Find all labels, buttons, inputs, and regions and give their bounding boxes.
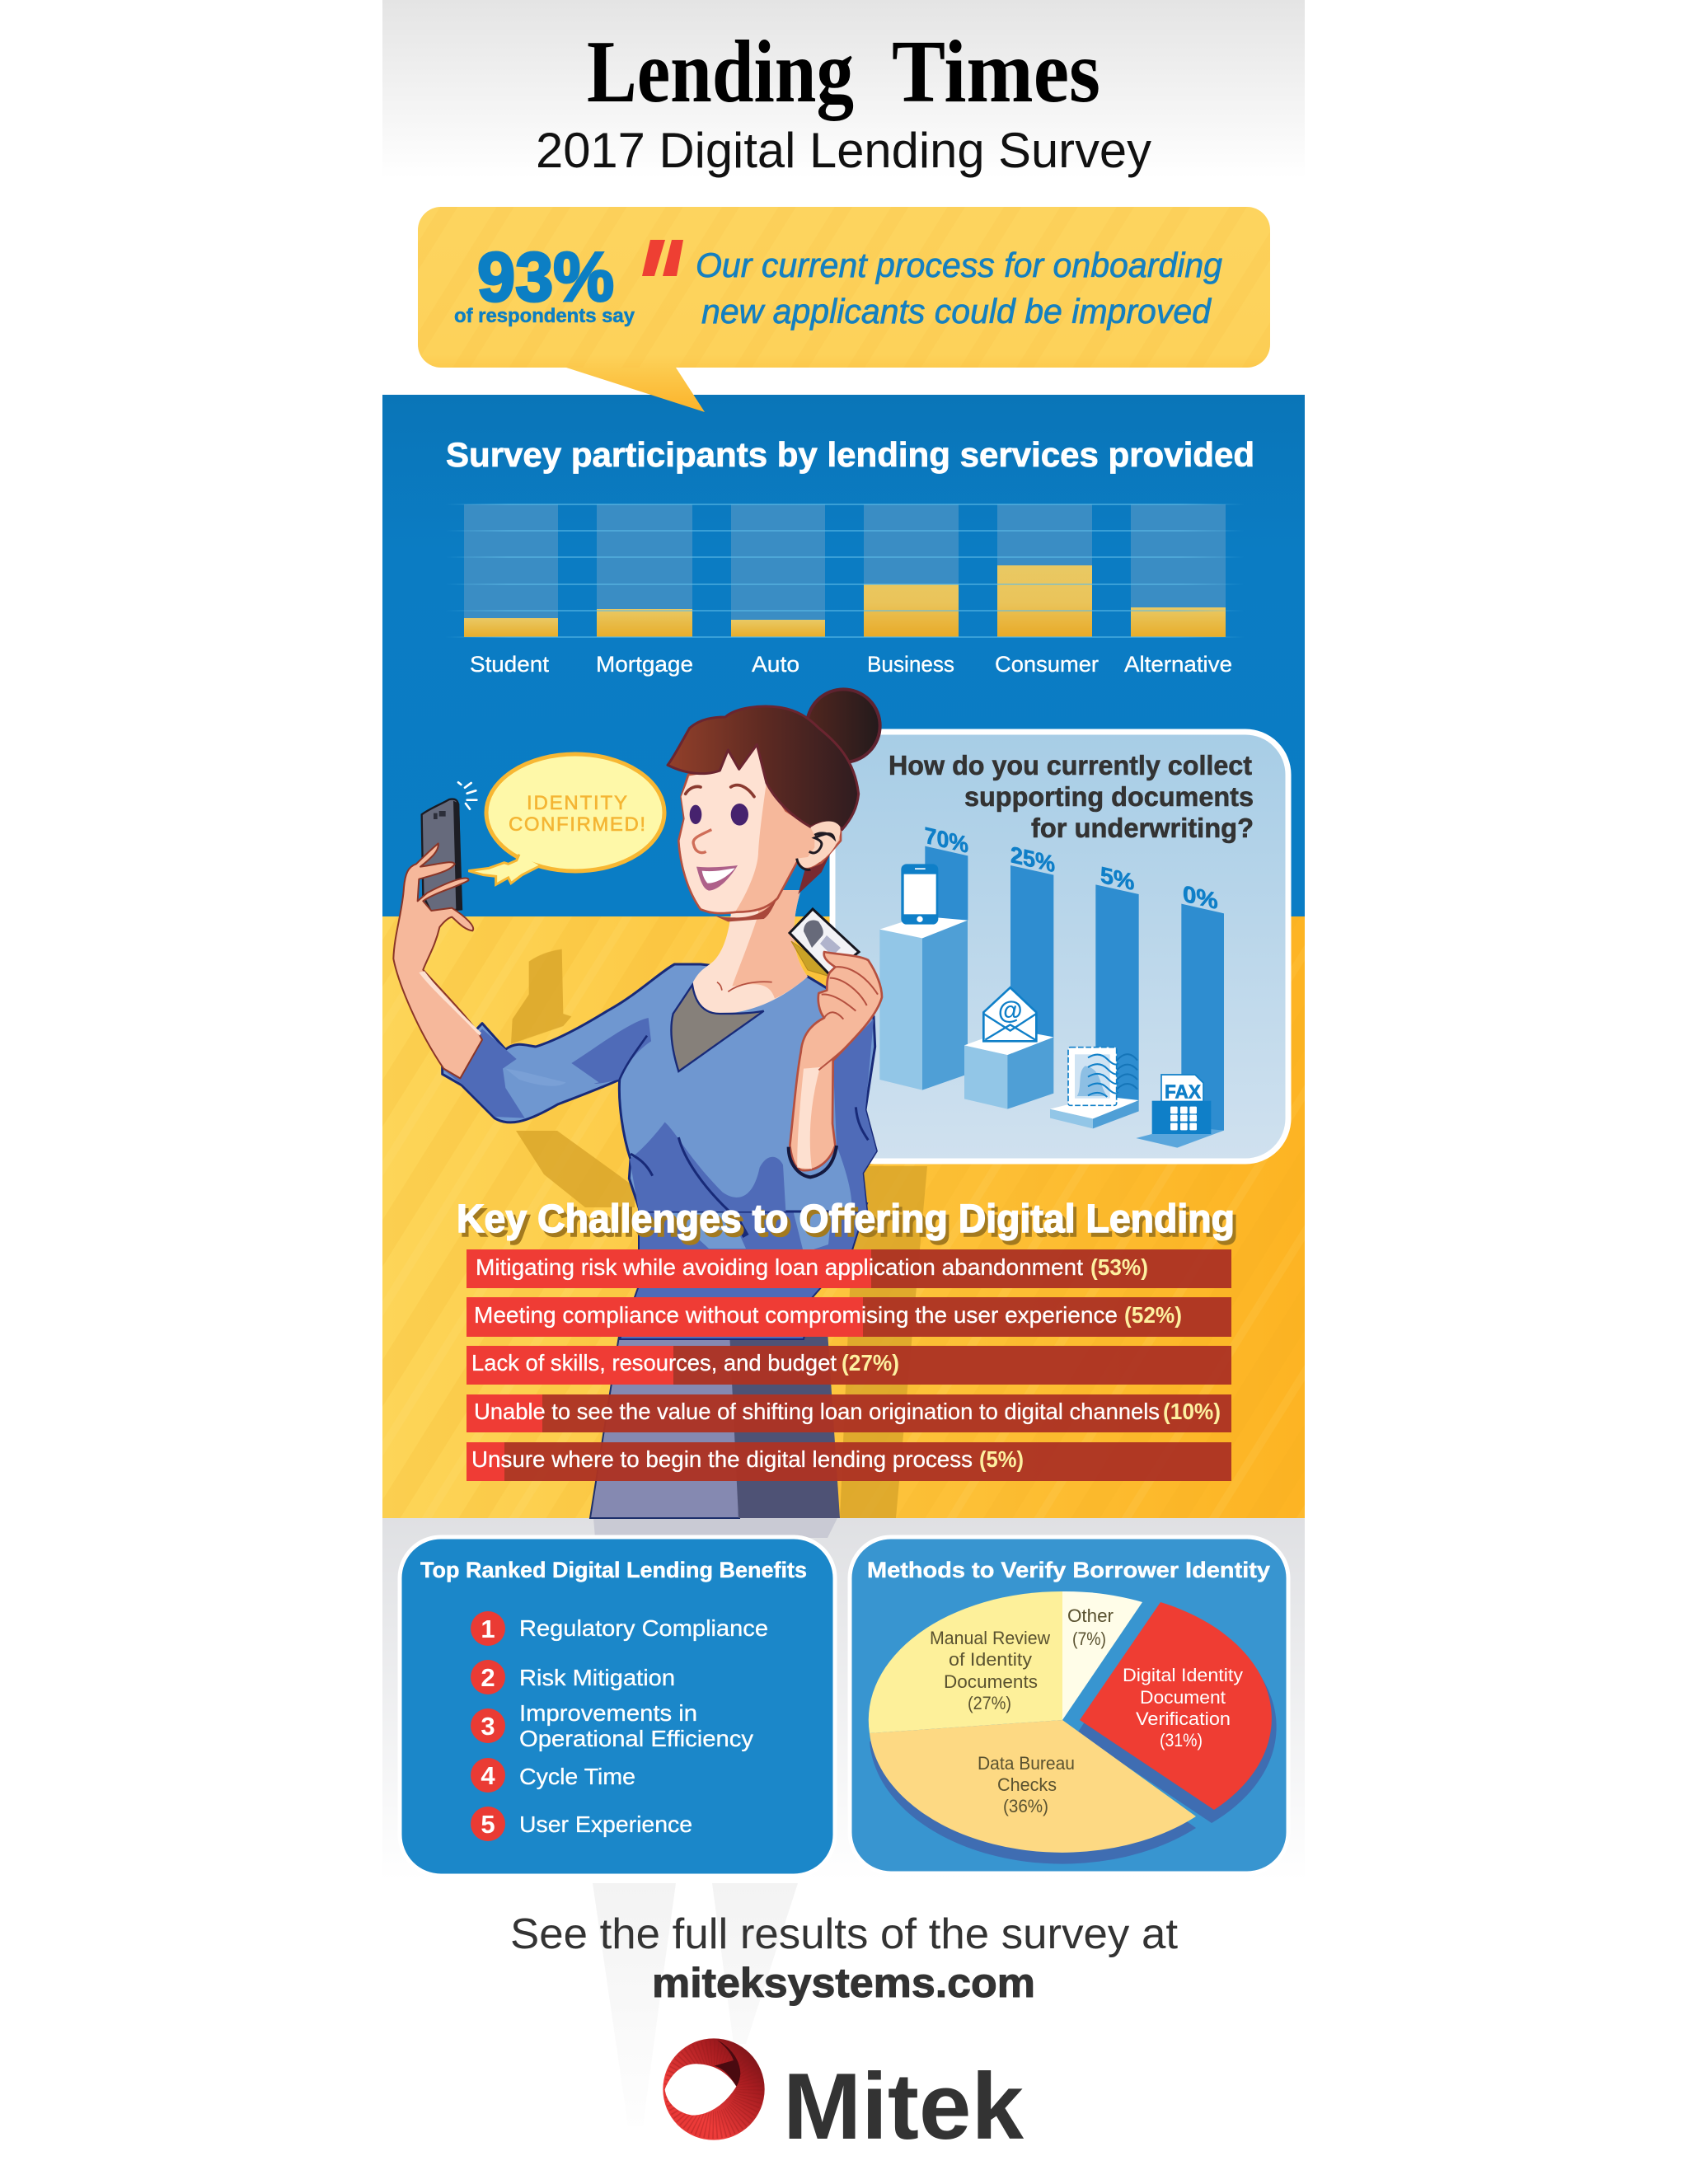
column: 25 percent email (964, 841, 1055, 1109)
label: data bureau: Data Bureau (978, 1753, 1075, 1774)
challenge 10 percent (467, 1394, 1231, 1432)
sleeve fold (620, 1036, 647, 1080)
pie slice: digital identity (1080, 1602, 1272, 1810)
label: data bureau: Checks (997, 1774, 1057, 1795)
pie slice: other (1062, 1591, 1142, 1720)
label: manual review: Manual Review (930, 1628, 1050, 1648)
question heading: How do you currently collect (889, 750, 1252, 780)
benefit 3: 3 (481, 1712, 495, 1741)
benefit 4: Cycle Time (519, 1764, 635, 1789)
label: manual review (930, 1628, 1050, 1713)
title (587, 23, 1100, 121)
benefit 5: User Experience (519, 1811, 692, 1837)
woman torso and shirt (443, 890, 876, 1212)
label: digital identity: Verification (1136, 1708, 1231, 1729)
icon: phone (422, 799, 462, 912)
column: 5 percent mail: 5% (1100, 862, 1134, 896)
footer call to action: See the full results of the survey at (510, 1910, 1179, 1958)
panel: methods to verify identity (850, 1537, 1288, 1873)
shirt folds (631, 1107, 868, 1212)
heading: survey participants: Survey participants by lending services provided (446, 435, 1254, 474)
woman head (668, 689, 880, 921)
ring radial ticks (678, 2054, 749, 2125)
column: 0 percent fax (1136, 881, 1224, 1148)
93 percent number: 93% (477, 238, 614, 316)
column: 70 percent phone: 70% (925, 823, 968, 859)
bar chart: lending services (445, 504, 1245, 677)
logo ring (663, 2038, 765, 2140)
benefits heading: Top Ranked Digital Lending Benefits (420, 1558, 807, 1582)
benefit 5: 5 (481, 1810, 495, 1839)
bar chart: lending services: Student (470, 652, 550, 677)
teeth (702, 868, 735, 883)
sleeve shading (443, 1018, 651, 1118)
benefit 2: 2 (481, 1663, 495, 1692)
panel: grey lower background (382, 1518, 1305, 1881)
trousers left leg (590, 1331, 739, 1518)
bar chart: lending services: Auto (752, 652, 799, 677)
label: digital identity (1123, 1665, 1243, 1750)
neck shading (732, 890, 808, 999)
trousers right leg (729, 1331, 840, 1518)
ear (796, 822, 841, 868)
ghost legs below the panel (593, 1518, 837, 2126)
quote line 2: new applicants could be improved (701, 292, 1212, 330)
heading: key challenges: Key Challenges to Offering Digital Lending (460, 1202, 1238, 1245)
bar chart: lending services: Alternative (1124, 652, 1232, 677)
jaw shadow (701, 898, 777, 921)
benefit 1: Regulatory Compliance (519, 1615, 768, 1641)
eyes (690, 804, 748, 826)
title: Times (892, 23, 1100, 121)
woman raised hand and phone (393, 782, 482, 1078)
label: other: Other (1067, 1605, 1114, 1626)
label: other: (7%) (1072, 1629, 1106, 1649)
label: digital identity: (31%) (1160, 1730, 1203, 1750)
bar chart: lending services: Business (867, 652, 954, 677)
speech bubble: identity confirmed (468, 754, 664, 884)
bar chart: lending services: Consumer (995, 652, 1099, 677)
benefit 1 (471, 1611, 768, 1646)
column: 25 percent email: 25% (1010, 841, 1055, 878)
column: 5 percent mail (1050, 862, 1139, 1128)
shirt lower highlights (659, 1203, 832, 1253)
challenge 10 percent: Unable to see the value of shifting loan origination to digital channels (474, 1399, 1160, 1424)
shirt lower shading (630, 1019, 876, 1212)
bar chart: lending services: Mortgage (596, 652, 693, 677)
isometric chart (879, 823, 1224, 1148)
mouth (696, 865, 738, 891)
panel: how do you collect documents (832, 732, 1288, 1161)
ring eye (665, 2064, 736, 2116)
benefit 4 (471, 1758, 635, 1793)
shirt (443, 964, 876, 1212)
footer call to action (510, 1910, 1179, 2006)
benefit 3: Operational Efficiency (519, 1726, 753, 1751)
phone edge (453, 801, 462, 910)
label: data bureau: (36%) (1003, 1796, 1048, 1816)
pie chart (869, 1591, 1277, 1864)
phone signal sparkle (458, 782, 476, 809)
hand and forearm (393, 843, 482, 1078)
benefit 3: Improvements in (519, 1700, 697, 1726)
shirt lower fold (731, 1210, 746, 1236)
pie depth (870, 1732, 1196, 1864)
column: 70 percent phone (879, 823, 968, 1090)
challenge 52 percent (467, 1297, 1231, 1337)
footer call to action: miteksystems.com (652, 1960, 1035, 2006)
challenge 53 percent (467, 1249, 1231, 1288)
challenge 10 percent: (10%) (1163, 1399, 1221, 1424)
question heading (889, 750, 1254, 843)
bar list: key challenges (467, 1249, 1231, 1481)
challenge 27 percent: (27%) (842, 1350, 899, 1376)
neck and chest (692, 890, 808, 1014)
ear inner (797, 833, 834, 869)
methods card (850, 1537, 1288, 1873)
collarbone (717, 982, 772, 991)
quote line 1: Our current process for onboarding (696, 246, 1222, 284)
face (678, 744, 841, 913)
hair behind neck (798, 830, 842, 894)
logo wordmark: Mitek (783, 2055, 1025, 2159)
challenge 52 percent: (52%) (1124, 1302, 1182, 1328)
panel: top ranked benefits (400, 1537, 835, 1876)
of respondents say: of respondents say (454, 305, 635, 327)
methods heading: Methods to Verify Borrower Identity (867, 1558, 1270, 1582)
heading: key challenges: Key Challenges to Offering Digital Lending (457, 1197, 1235, 1241)
challenge 27 percent (467, 1346, 1231, 1385)
label: data bureau (978, 1753, 1075, 1816)
icon: quotation mark (642, 240, 683, 276)
benefits card (400, 1537, 835, 1876)
label: digital identity: Document (1140, 1687, 1226, 1708)
subtitle: 2017 Digital Lending Survey (536, 123, 1151, 178)
column: 25 percent email: @ (998, 996, 1023, 1024)
shirt lower (620, 1203, 867, 1339)
label: other (1067, 1605, 1114, 1649)
callout stripes (418, 207, 1270, 368)
benefit 3 (471, 1700, 753, 1751)
speech bubble: identity confirmed: CONFIRMED! (509, 813, 645, 836)
face light area (680, 745, 767, 912)
woman shadow on yellow background (511, 949, 927, 1518)
challenge 53 percent: (53%) (1090, 1254, 1148, 1280)
challenge 5 percent: (5%) (979, 1446, 1024, 1472)
challenge 52 percent: Meeting compliance without compromising the user experience (474, 1302, 1118, 1328)
panel card (832, 732, 1288, 1161)
pie slice: manual review (869, 1591, 1062, 1733)
forearm highlight (419, 971, 481, 1036)
pie slice: data bureau (870, 1720, 1196, 1853)
ring inner dark crescent (715, 2040, 740, 2087)
hair bun (807, 689, 880, 762)
panel: survey participants background (382, 395, 1305, 917)
question heading: for underwriting? (1031, 813, 1254, 843)
panel: yellow lower background (382, 916, 1305, 1518)
forearm highlight (797, 1067, 820, 1169)
speech bubble: identity confirmed: IDENTITY (527, 792, 627, 814)
nose (693, 830, 711, 853)
label: manual review: Documents (944, 1671, 1038, 1692)
phone camera (434, 811, 446, 819)
hand and forearm shape (790, 952, 882, 1170)
hair (668, 706, 859, 830)
benefit 4: 4 (481, 1761, 495, 1790)
callout bubble (418, 207, 1270, 412)
benefit 1: 1 (481, 1615, 495, 1643)
callout: 93 percent (418, 207, 1270, 412)
challenge 5 percent (467, 1442, 1231, 1481)
sleeve cuff (789, 1146, 837, 1177)
woman lower body (590, 1203, 867, 1518)
label: manual review: of Identity (949, 1649, 1032, 1670)
challenge 53 percent: Mitigating risk while avoiding loan application abandonment (476, 1254, 1083, 1280)
label: manual review: (27%) (968, 1693, 1011, 1713)
woman right hand and forearm (789, 952, 882, 1177)
finger lines (818, 967, 878, 1070)
benefit 2: Risk Mitigation (519, 1665, 675, 1690)
challenge 5 percent: Unsure where to begin the digital lending process (471, 1446, 973, 1472)
column: 0 percent fax: 0% (1183, 881, 1218, 915)
challenge 27 percent: Lack of skills, resources, and budget (471, 1350, 837, 1376)
eyebrows (686, 785, 754, 797)
header background (382, 0, 1305, 178)
benefit 2 (471, 1660, 675, 1694)
column: 0 percent fax: FAX (1165, 1081, 1201, 1103)
logo: Mitek (663, 2038, 1025, 2159)
label: digital identity: Digital Identity (1123, 1665, 1243, 1685)
benefit 5 (471, 1807, 692, 1841)
undershirt (671, 985, 764, 1071)
icon: id card (790, 909, 859, 976)
ring disc (663, 2038, 765, 2140)
question heading: supporting documents (964, 781, 1254, 812)
title: Lending (587, 23, 854, 121)
sleeve light patch (505, 1069, 566, 1086)
